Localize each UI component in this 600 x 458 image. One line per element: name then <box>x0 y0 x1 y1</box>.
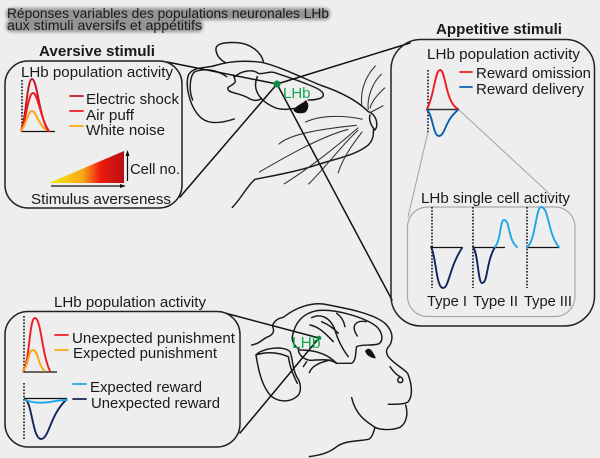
icon: mouse head <box>187 43 385 207</box>
legend: White noise <box>86 122 165 139</box>
legend: punishment: Expected punishment <box>73 345 218 362</box>
heading: aversive: Aversive stimuli <box>39 43 155 60</box>
legend: Air puff <box>86 107 135 124</box>
label: monkey LHb: LHb <box>292 335 320 352</box>
title <box>6 5 330 33</box>
legend: punishment: Unexpected punishment <box>72 330 236 347</box>
panel: aversive stimuli <box>5 61 182 208</box>
title: Réponses variables des populations neuronales LHb <box>7 5 329 21</box>
panel heading: LHb population activity <box>21 64 173 81</box>
label: mouse LHb <box>274 80 311 102</box>
icon: monkey head <box>252 304 411 457</box>
chart: type II <box>473 207 518 310</box>
chart: type I: Type I <box>427 293 467 310</box>
chart: type II: Type II <box>473 293 518 310</box>
legend: punishment <box>55 330 236 362</box>
legend: reward: Unexpected reward <box>91 395 220 412</box>
heading: appetitive: Appetitive stimuli <box>436 21 562 38</box>
chart: reward <box>24 383 67 440</box>
grey zoom lines <box>408 109 553 217</box>
label: mouse LHb: LHb <box>283 85 311 102</box>
connector lines <box>167 43 410 433</box>
gradient triangle: stimulus averseness <box>31 150 180 208</box>
legend: reward: Expected reward <box>90 379 202 396</box>
legend: reward <box>73 379 220 412</box>
gradient triangle: stimulus averseness: Cell no. <box>130 161 180 178</box>
line chart: appetitive responses <box>427 70 458 136</box>
legend <box>70 91 179 139</box>
chart: type III <box>524 207 572 310</box>
panel: appetitive stimuli <box>391 39 595 326</box>
panel heading: LHb population activity <box>427 46 580 63</box>
chart: type I <box>427 207 467 310</box>
legend: Reward omission <box>476 65 591 82</box>
panel: single cell activity <box>408 207 575 316</box>
gradient triangle: stimulus averseness: Stimulus averseness <box>31 191 171 208</box>
subheading: single cell: LHb single cell activity <box>421 190 570 207</box>
chart: punishment <box>23 316 57 372</box>
heading: monkey panel: LHb population activity <box>54 294 206 311</box>
legend: Electric shock <box>86 91 179 108</box>
panel: monkey population activity <box>5 312 240 447</box>
chart: type III: Type III <box>524 293 572 310</box>
legend: Reward delivery <box>476 81 584 98</box>
title: aux stimuli aversifs et appétitifs <box>7 17 202 33</box>
legend <box>460 65 591 98</box>
line chart: aversive responses <box>21 79 55 132</box>
